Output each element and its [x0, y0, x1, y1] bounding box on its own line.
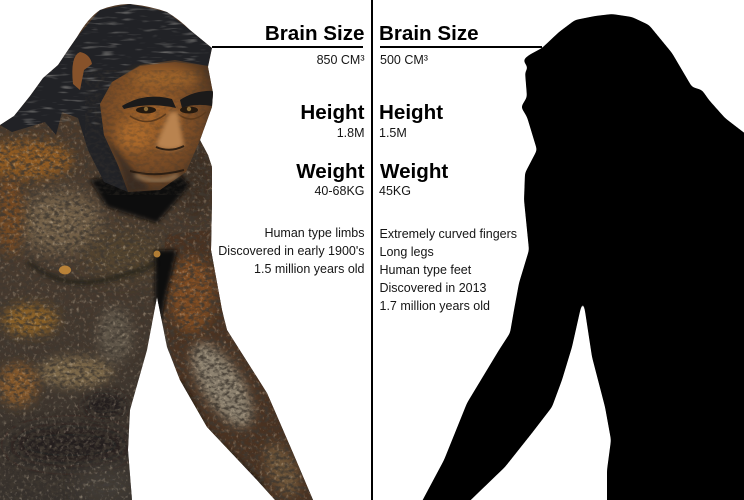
armpit shadow — [155, 250, 177, 325]
facts list: Human type feet — [380, 263, 472, 277]
figure: Homo naledi silhouette — [412, 14, 744, 500]
figure: Homo erectus statue — [0, 0, 320, 500]
brows — [122, 91, 214, 109]
statue base colour — [0, 0, 320, 500]
value: weight: 40-68KG — [314, 184, 364, 198]
value: weight: 45KG — [379, 184, 411, 198]
facts list: 1.7 million years old — [380, 299, 490, 313]
value: height: 1.5M — [379, 126, 407, 140]
centre divider — [371, 0, 373, 500]
facts list: Long legs — [380, 245, 434, 259]
facts list: Extremely curved fingers — [380, 227, 517, 241]
left column: Homo erectus stats — [212, 22, 365, 276]
heading: brain size: Brain Size — [379, 22, 479, 45]
heading: weight: Weight — [380, 160, 448, 183]
facts list: Human type limbs — [264, 226, 364, 240]
arm — [163, 230, 315, 500]
fur texture — [0, 110, 320, 500]
value: height: 1.8M — [337, 126, 364, 140]
heading: height: Height — [300, 101, 365, 124]
nose — [156, 112, 184, 150]
pointer line to head — [212, 46, 363, 48]
facts list — [218, 226, 365, 276]
eyes — [130, 106, 206, 122]
right column: Homo naledi stats — [379, 22, 542, 313]
facts list: 1.5 million years old — [254, 262, 365, 276]
facts list: Discovered in 2013 — [380, 281, 487, 295]
ear — [72, 52, 92, 90]
facts list — [380, 227, 517, 313]
shoulder and chest colouring — [0, 140, 213, 500]
value: brain size: 850 CM³ — [317, 53, 364, 67]
hair — [0, 4, 212, 192]
neck shadow — [90, 174, 191, 225]
heading: height: Height — [379, 101, 443, 124]
heading: weight: Weight — [296, 160, 365, 183]
facts list: Discovered in early 1900's — [218, 244, 364, 258]
pointer line to head — [380, 46, 542, 48]
chest nipples — [28, 250, 160, 283]
mouth — [130, 170, 184, 180]
value: brain size: 500 CM³ — [380, 53, 428, 67]
heading: brain size: Brain Size — [265, 22, 364, 45]
face — [85, 62, 215, 195]
